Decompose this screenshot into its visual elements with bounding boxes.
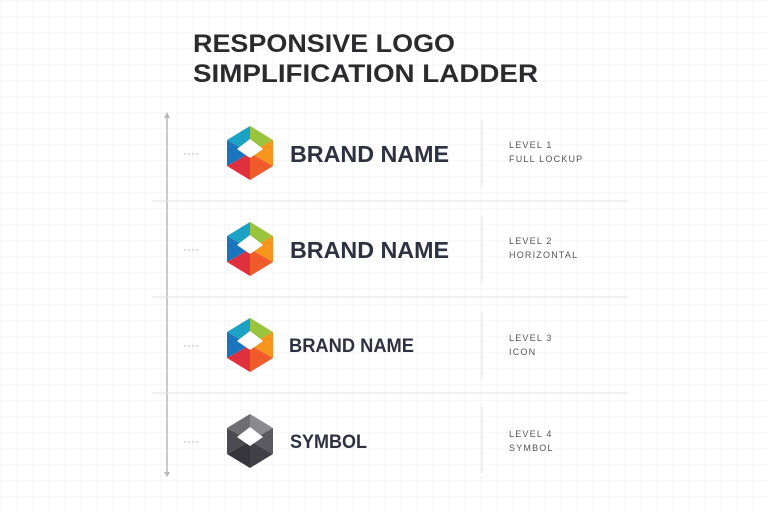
brand name: BRAND NAME <box>290 141 449 167</box>
title <box>193 30 538 88</box>
level label: LEVEL 3 <box>509 333 553 343</box>
brand name: BRAND NAME <box>289 336 414 357</box>
row dividers <box>152 201 628 393</box>
row 1: full lockup: FULL LOCKUP <box>509 154 583 164</box>
icon: color hexagon <box>227 126 273 180</box>
icon: color hexagon <box>227 318 273 372</box>
brand name: BRAND NAME <box>290 237 449 263</box>
row 2: horizontal <box>184 216 578 283</box>
level label: LEVEL 2 <box>509 236 553 246</box>
row 2: horizontal: HORIZONTAL <box>509 250 578 260</box>
vertical scale axis <box>164 112 170 477</box>
row 3: icon: ICON <box>509 347 536 357</box>
title: SIMPLIFICATION LADDER <box>193 60 538 88</box>
title: RESPONSIVE LOGO <box>193 30 455 58</box>
icon: grey hexagon <box>227 414 273 468</box>
row 4: symbol <box>184 406 554 473</box>
row 3: icon <box>184 312 553 379</box>
row 4: symbol: SYMBOL <box>509 443 554 453</box>
icon: color hexagon <box>227 222 273 276</box>
level label: LEVEL 4 <box>509 429 553 439</box>
symbol label: SYMBOL <box>290 432 367 453</box>
row 1: full lockup <box>184 120 583 187</box>
level label: LEVEL 1 <box>509 140 553 150</box>
